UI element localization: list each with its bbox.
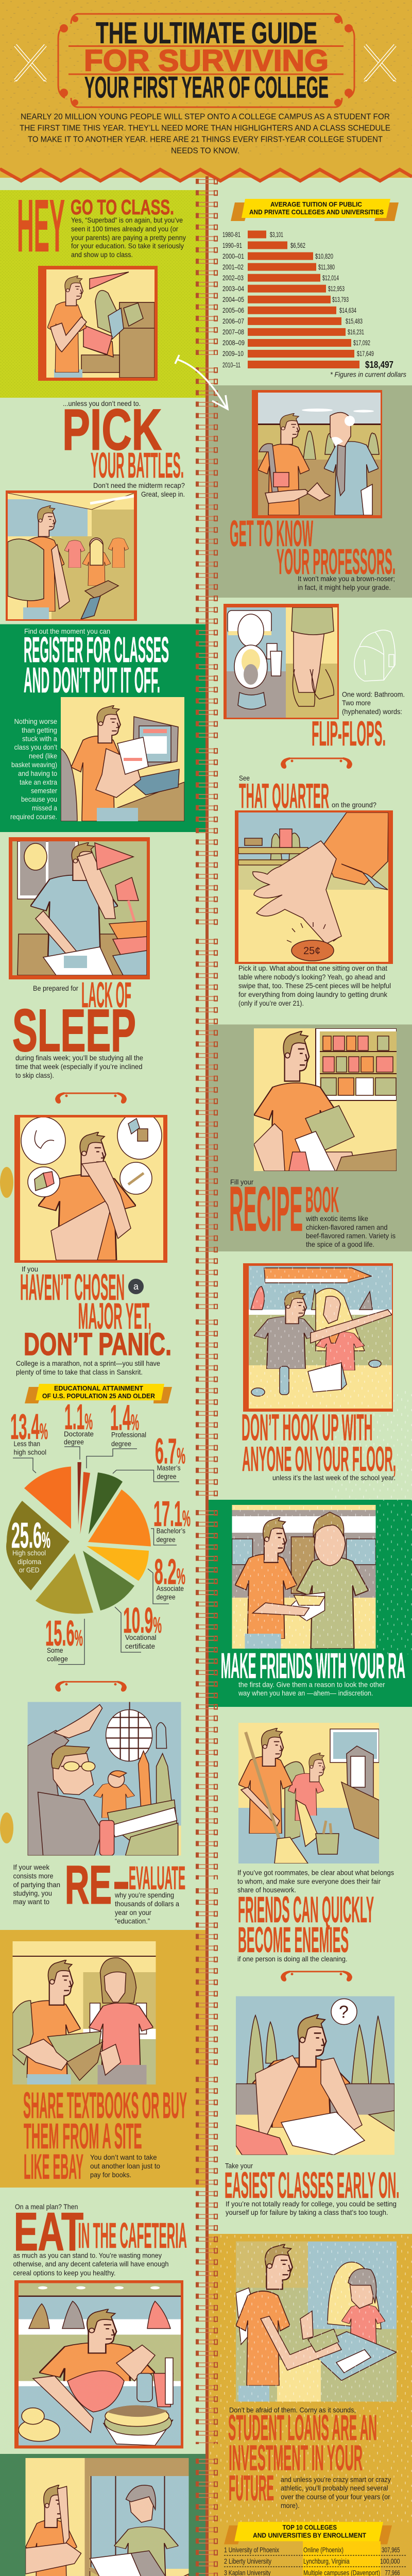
locations: Online (Phoenix) (303, 2546, 344, 2554)
ribbon banner: pie title: OF U.S. POPULATION 25 AND OLDER (42, 1392, 156, 1400)
label: professional: degree (111, 1439, 131, 1448)
ribbon banner: table title: TOP 10 COLLEGES (282, 2523, 337, 2531)
badge: a (128, 1279, 144, 1294)
text: if your week: may want to (13, 1897, 49, 1906)
illustration: student meeting professor (252, 390, 382, 518)
illustration: picking up a quarter: 25¢ (303, 945, 320, 957)
paint speckles (0, 1167, 412, 2576)
text: yourself up for failure by taking a class that’s too tough. (226, 2208, 388, 2216)
text: over the course of your four years (or (281, 2493, 390, 2501)
text block (71, 216, 186, 259)
section: pick your battles (62, 398, 185, 498)
value labels (270, 230, 393, 370)
text: nothing worse: than getting (22, 726, 57, 734)
enrollment numbers (380, 2546, 400, 2576)
heading: go to class: GO TO CLASS. (71, 195, 174, 219)
text: more). (281, 2501, 300, 2510)
text (238, 1681, 385, 1697)
illustration: bathroom flip-flops (224, 604, 339, 719)
label: less than high school: Less than (13, 1439, 40, 1448)
intro paragraph (20, 112, 390, 156)
label: vocational (123, 1600, 162, 1650)
value labels: $17,649 (357, 349, 374, 358)
intro paragraph: THE FIRST TIME THIS YEAR. THEY’LL NEED MORE THAN HIGHLIGHTERS AND A CLASS SCHEDULE (20, 124, 390, 133)
label: bachelor's: 17.1% (153, 1494, 191, 1534)
text: You don’t want to take (90, 2153, 157, 2161)
text: athletic, you’ll probably need several (281, 2484, 388, 2492)
label: some college (45, 1613, 83, 1663)
illustration: confused student: ? (339, 2003, 349, 2022)
label: doctorate (64, 1397, 94, 1446)
ornament (281, 757, 352, 769)
label: professional (110, 1398, 146, 1448)
label: some college: Some (47, 1646, 63, 1654)
year labels: 2001–02 (222, 263, 244, 271)
label: vocational: 10.9% (123, 1600, 162, 1640)
ribbon banner: pie title: EDUCATIONAL ATTAINMENT (54, 1384, 143, 1392)
label: vocational: certificate (125, 1642, 155, 1650)
text: brown-noser (298, 574, 395, 591)
text: if your week: consists more (13, 1872, 54, 1880)
heading: pick: PICK (62, 398, 162, 462)
text: exotic items: beef-flavored ramen. Variety is (306, 1231, 396, 1240)
text: one word: One word: Bathroom. (342, 690, 405, 699)
text: HAVEN’T CHOSEN (20, 1267, 125, 1308)
year labels: 2008–09 (222, 338, 245, 347)
text (90, 2153, 160, 2179)
illustration: credit card shopping (26, 2458, 188, 2576)
text: pick it up: for everything from doing laundry to getting drunk (238, 990, 388, 998)
year labels: 2000–01 (222, 252, 244, 260)
label: high school diploma: diploma (18, 1557, 41, 1566)
text: one word: (hyphenated) words: (342, 707, 402, 716)
value labels: $18,497 (365, 360, 393, 370)
label: master's: 6.7% (155, 1431, 185, 1471)
label: associate: 8.2% (154, 1552, 185, 1592)
text: roommates: If you’ve got roommates, be clear about what belongs (237, 1869, 394, 1877)
intro paragraph: NEEDS TO KNOW. (171, 146, 239, 156)
panel: share textbooks (0, 1930, 206, 2188)
text: roommates: share of housework. (237, 1886, 296, 1894)
text: out another loan just to (90, 2162, 160, 2170)
zigzag border (0, 155, 412, 181)
ornament (281, 1971, 352, 1981)
value labels: $13,793 (332, 295, 349, 303)
text: If you’re not totally ready for college, you could be setting (226, 2200, 397, 2208)
text: finals week (15, 1054, 143, 1079)
text block: for your education. So take it seriously (71, 242, 184, 250)
panel: recipe book (209, 1024, 412, 1251)
section: eat in the cafeteria (13, 2202, 187, 2277)
year labels (222, 230, 245, 369)
value labels: $6,562 (290, 241, 305, 249)
ornament (55, 1092, 127, 1104)
intro paragraph: TO MAKE IT TO ANOTHER YEAR. HERE ARE 21 THINGS EVERY FIRST-YEAR COLLEGE STUDENT (28, 135, 383, 144)
text: if your week: studying, you (13, 1889, 52, 1897)
heading: re-: RE (65, 1855, 112, 1916)
pie chart: educational attainment (6, 1384, 191, 1665)
panel: gold header background (0, 0, 412, 178)
value labels: $15,483 (346, 317, 363, 325)
label: less than high school: high school (13, 1448, 46, 1456)
illustration: cafeteria meal (14, 2280, 183, 2448)
illustration: classroom (6, 490, 137, 621)
illustration: grocery shopping (254, 1028, 397, 1171)
section: recipe book: BOOK (305, 1180, 339, 1220)
table: top 10 colleges by enrollment (224, 2522, 406, 2576)
label: some college: 15.6% (45, 1613, 83, 1653)
text: one word: Two more (342, 699, 371, 707)
label: high school diploma: or GED (19, 1566, 39, 1574)
notebook spine and rings (195, 176, 219, 2576)
heading: sleep: SLEEP (12, 997, 136, 1064)
label: master's (155, 1431, 185, 1481)
text: EVALUATE (129, 1859, 185, 1896)
icon: backpack outline white (354, 630, 395, 681)
year labels: 2006–07 (222, 317, 244, 325)
panel: make friends with your RA (209, 1500, 412, 1707)
text: if your week: If your week (13, 1863, 50, 1871)
text: nothing worse: take an extra (20, 778, 57, 786)
section: go to class: HEY (17, 184, 65, 267)
text: MAJOR YET, (78, 1296, 151, 1337)
text: midterm: Great, sleep in. (141, 490, 185, 498)
badge: a: a (133, 1281, 139, 1292)
label: doctorate: Doctorate (64, 1430, 94, 1438)
text: see: See (239, 774, 250, 782)
text: why you're spending: year on your (115, 1908, 151, 1917)
college names: 1 University of Phoenix (224, 2546, 279, 2554)
text block: Yes, “Superbad” is on again, but you’ve (71, 216, 183, 224)
text: nothing worse: and having to (18, 769, 57, 777)
text: one word (342, 690, 405, 716)
label: associate: Associate (157, 1584, 184, 1592)
pie slices (6, 1462, 151, 1614)
illustration: bank teller loan (236, 2241, 397, 2402)
text: why you're spending (114, 1891, 179, 1925)
text: way when you have an —ahem— indiscretion. (238, 1689, 373, 1697)
text: finals week: during finals week; you’ll be studying all the (15, 1054, 143, 1062)
year labels: 2009–10 (222, 349, 244, 358)
label: bachelor's: Bachelor’s (157, 1527, 185, 1535)
ribbon banner: table title (224, 2522, 392, 2544)
text: why you're spending: why you’re spending (114, 1891, 174, 1899)
label: doctorate: degree (64, 1438, 84, 1446)
text: the first day. Give them a reason to look the other (238, 1681, 385, 1689)
heading (228, 2408, 377, 2508)
text: if your week (13, 1863, 60, 1906)
text: why you're spending: “education.” (115, 1917, 150, 1925)
illustration: party disco (28, 1702, 181, 1856)
text: as much as you can stand to. You’re wasting money (13, 2251, 162, 2260)
label: master's: degree (157, 1472, 177, 1481)
year labels: 2003–04 (222, 284, 244, 293)
text: take your: Take your (225, 2162, 253, 2170)
title: FOR SURVIVING (84, 44, 329, 77)
year labels: 2005–06 (222, 306, 244, 314)
value labels: $3,101 (270, 230, 283, 239)
text: find out: Find out the moment you can (24, 627, 110, 635)
section: share textbooks (23, 2086, 187, 2187)
text block: and show up to class. (71, 250, 133, 259)
illustration: friends with RA (232, 1505, 376, 1649)
bar chart: average tuition (222, 199, 406, 379)
enrollment numbers: 100,000 (380, 2557, 400, 2565)
text: nothing worse: required course. (10, 812, 57, 821)
text: don't be afraid: Don’t be afraid of them. Corny as it sounds, (229, 2405, 356, 2414)
section: lack of sleep (12, 975, 143, 1079)
bars (248, 231, 359, 368)
text: LACK OF (81, 975, 131, 1015)
value labels: $16,231 (348, 328, 364, 336)
text (281, 2475, 391, 2510)
text: pick it up: (only if you’re over 21). (238, 999, 304, 1007)
label: high school diploma (11, 1515, 50, 1574)
college names: 2 Liberty University (224, 2557, 271, 2565)
intro paragraph: NEARLY 20 MILLION YOUNG PEOPLE WILL STEP ONTO A COLLEGE CAMPUS AS A STUDENT FOR (21, 112, 390, 122)
locations (303, 2546, 380, 2576)
title: THE ULTIMATE GUIDE (96, 16, 317, 50)
heading: get to know your professors (230, 514, 396, 582)
text: exotic items: chicken-flavored ramen and (306, 1223, 387, 1231)
text block: your parents) are paying a pretty penny (71, 233, 186, 242)
text: exotic items: the spice of a good life. (306, 1240, 374, 1248)
text: exotic items (305, 1214, 396, 1248)
label: master's: Master’s (157, 1464, 181, 1472)
arrow: from go to class to get to know your professors (175, 355, 228, 409)
ribbon banner: pie title (25, 1384, 172, 1403)
year labels: 1980-81 (222, 230, 241, 239)
year labels: 2004–05 (222, 295, 244, 303)
text: pick it up (238, 964, 391, 1007)
heading: LIKE EBAY (24, 2147, 83, 2187)
section: register for classes (10, 627, 169, 821)
text (226, 2200, 397, 2216)
panel: credit (0, 2454, 206, 2576)
text: pick it up: swipe that, too. These 25-cent pieces will be helpful (238, 981, 391, 990)
text: unless: ...unless you don’t need to. (63, 399, 141, 408)
ornament (55, 1681, 127, 1692)
panel: student loans (209, 2234, 412, 2576)
panel: go to class (0, 190, 206, 398)
text: on the ground: on the ground? (332, 801, 376, 809)
text: nothing worse: semester (31, 787, 57, 795)
panel: register (0, 624, 206, 832)
value labels: $17,092 (353, 338, 370, 347)
text: if your week: of partying than (13, 1880, 60, 1889)
heading: eat: EAT (14, 2202, 83, 2262)
text: and unless you’re crazy smart or crazy (281, 2475, 391, 2483)
text: pay for books. (90, 2171, 131, 2179)
text: why you're spending: thousands of dollars a (115, 1900, 179, 1908)
leader lines (13, 1447, 179, 1665)
text: pick it up: Pick it up. What about that one sitting over on that (238, 964, 387, 972)
text: nothing worse: Nothing worse (14, 717, 57, 725)
label: less than high school (10, 1406, 48, 1456)
panel: get to know your professors (209, 385, 412, 598)
value labels: $12,014 (322, 274, 339, 282)
text: roommates: to whom, and make sure everyone does their fair (237, 1877, 381, 1885)
illustration: student at computer (61, 697, 184, 821)
text block: seen it 100 times already and you (or (71, 225, 178, 233)
text: if you: If you (22, 1265, 38, 1273)
illustration: student thinking about majors (14, 1112, 167, 1263)
value labels: $12,953 (328, 284, 345, 293)
label: some college: college (47, 1655, 68, 1663)
heading: friends can quickly become enemies (238, 1890, 374, 1960)
year labels: 2007–08 (222, 328, 244, 336)
illustration: sharing textbooks (12, 1941, 156, 2084)
illustration: roommates and housework (238, 1723, 379, 1863)
value labels: $10,820 (315, 252, 333, 260)
label: high school diploma: 25.6% (11, 1515, 50, 1555)
value labels: $14,634 (339, 306, 356, 314)
section: haven't chosen a major (16, 1265, 171, 1376)
text: nothing worse: because you (21, 795, 57, 803)
text: nothing worse: stuck with a (22, 735, 57, 743)
text: THEM FROM A SITE (24, 2116, 142, 2156)
label: vocational: Vocational (125, 1633, 157, 1641)
ribbon banner: chart title: AVERAGE TUITION OF PUBLIC (270, 200, 363, 208)
ribbon banner: chart title: AND PRIVATE COLLEGES AND UNIVERSITIES (249, 208, 384, 216)
ribbon banner: table title: AND UNIVERSITIES BY ENROLLMENT (253, 2532, 366, 2539)
label: associate (154, 1552, 185, 1601)
label: professional: 1.4% (110, 1398, 139, 1438)
text (13, 2251, 169, 2277)
title (84, 16, 329, 104)
text: last week: unless it’s the last week of the school year. (272, 1473, 396, 1482)
heading (23, 2086, 187, 2187)
text: otherwise, and any decent cafeteria will have enough (13, 2260, 169, 2268)
illustration: student packing books (38, 266, 158, 381)
text: roommates (237, 1869, 394, 1894)
heading: don't panic: DON’T PANIC. (24, 1327, 171, 1362)
title frame ornament (58, 14, 354, 107)
text: brown-noser: It won’t make you a brown-noser; (298, 574, 395, 583)
text: meal plan: On a meal plan? Then (15, 2202, 78, 2211)
text: midterm (93, 481, 185, 498)
enrollment numbers: 307,965 (382, 2546, 400, 2554)
ribbon banner: chart title (231, 199, 399, 221)
text: pick it up: table where nobody’s looking? Yeah, go ahead and (238, 973, 385, 981)
illustration: confused student (236, 1996, 394, 2155)
text: marathon: plenty of time to take that class in Sanskrit. (16, 1368, 143, 1376)
section: re-evaluate (13, 1855, 185, 1925)
section: easiest classes (225, 2162, 400, 2216)
text: exotic items: with exotic items like (305, 1214, 368, 1223)
text: cereal options to keep you healthy. (13, 2269, 115, 2277)
text: finals week: time that week (especially if you’re inclined (15, 1062, 142, 1071)
year labels: 1990–91 (222, 241, 242, 249)
text: YOUR BATTLES. (91, 445, 184, 485)
label: less than high school: 13.4% (10, 1406, 48, 1447)
label: associate: degree (157, 1593, 176, 1601)
chart footnote: * Figures in current dollars (330, 370, 406, 379)
illustration: tired student studying (9, 837, 150, 979)
text: marathon: College is a marathon, not a sprint—you still have (16, 1359, 160, 1367)
text: nothing worse (10, 717, 57, 821)
text: nothing worse: need (like (29, 752, 57, 760)
heading: FUTURE (229, 2468, 274, 2508)
text: cleaning: if one person is doing all the cleaning. (237, 1955, 347, 1963)
icon: crossed pencils right (364, 45, 397, 82)
icon: crossed pencils left (14, 45, 47, 82)
label: doctorate: 1.1% (64, 1397, 93, 1437)
year labels: 2010–11 (222, 361, 241, 369)
label: bachelor's: degree (157, 1535, 176, 1544)
label: professional: Professional (111, 1431, 146, 1439)
text: brown-noser: in fact, it might help your grade. (298, 583, 391, 591)
text: finals week: to skip class). (15, 1071, 54, 1079)
text: marathon (16, 1359, 160, 1376)
locations: Lynchburg, Virginia (303, 2557, 350, 2565)
section: student loans (228, 2405, 391, 2510)
label: bachelor's (153, 1494, 191, 1544)
text: nothing worse: missed a (32, 804, 57, 812)
text: nothing worse: class you don’t (14, 743, 57, 751)
text: nothing worse: basket weaving) (11, 760, 57, 769)
heading: don't hook up (242, 1408, 396, 1479)
illustration: couple at a booth (243, 1263, 393, 1412)
college names (224, 2546, 299, 2576)
illustration: picking up a quarter (235, 810, 393, 964)
text: fill your: Fill your (230, 1178, 253, 1186)
text: IN THE CAFETERIA (78, 2215, 187, 2256)
text: be prepared: Be prepared for (33, 984, 78, 992)
value labels: $11,380 (318, 263, 335, 271)
year labels: 2002–03 (222, 274, 244, 282)
section: make friends with your RA (221, 1646, 405, 1697)
label: high school diploma: High school (12, 1549, 46, 1557)
text: midterm: Don’t need the midterm recap? (93, 481, 185, 489)
